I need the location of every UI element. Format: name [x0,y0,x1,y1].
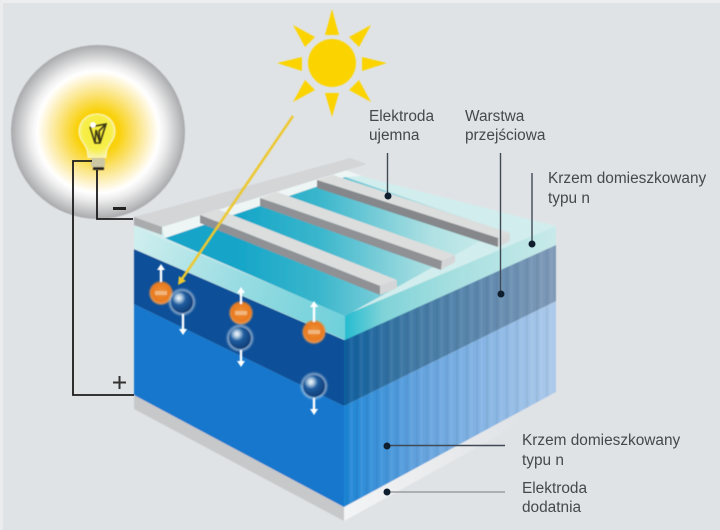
light sheen near bus bar [162,170,362,238]
label: top n-type silicon: Krzem domieszkowany [548,170,707,187]
electrode finger 2 [260,192,455,270]
negative electrode bus bar [134,158,367,235]
halo circle [11,45,185,219]
active cell stripes [165,177,500,316]
electrode finger 1 [200,209,397,295]
label: top n-type silicon: typu n [548,190,590,207]
blue charge 3 [300,372,328,415]
label: negative electrode [369,108,434,200]
sun rays [277,9,387,117]
bulb filament highlight [90,122,96,128]
label: negative electrode: ujemna [369,127,420,144]
label: lower n-type silicon: Krzem domieszkowany [522,432,681,449]
bulb filament [90,124,106,143]
charge carriers [150,264,328,415]
label: negative electrode: Elektroda [369,108,434,125]
n-type silicon top glass layer [134,172,556,340]
bulb glass [79,114,115,158]
orange charge 2 [230,287,252,324]
n-type silicon lower layer [134,301,556,507]
transition layer [134,245,556,406]
label: lower n-type silicon [384,432,681,469]
sunlight ray arrow [178,116,293,285]
label: positive electrode: dodatnia [522,499,581,516]
minus sign [113,207,126,210]
positive electrode base [134,392,556,521]
orange charge 1 [150,264,172,304]
blue charge 1 [168,288,196,335]
icon: light bulb with halo [11,45,185,219]
plus sign [113,376,126,389]
electrode finger 3 [317,175,510,247]
bulb base [91,158,105,170]
label: top n-type silicon [528,170,707,248]
icon: sun [277,9,387,117]
blue charge 2 [226,324,254,367]
label: transition layer: Warstwa [465,108,525,125]
orange charge 3 [302,301,326,344]
label: positive electrode [384,480,587,516]
label: positive electrode: Elektroda [522,480,587,497]
solar cell block [134,158,556,521]
label: transition layer [465,108,546,298]
label: lower n-type silicon: typu n [522,452,564,469]
wires to bulb [73,161,134,395]
label: transition layer: przejściowa [465,127,546,144]
sun disc [308,39,356,87]
